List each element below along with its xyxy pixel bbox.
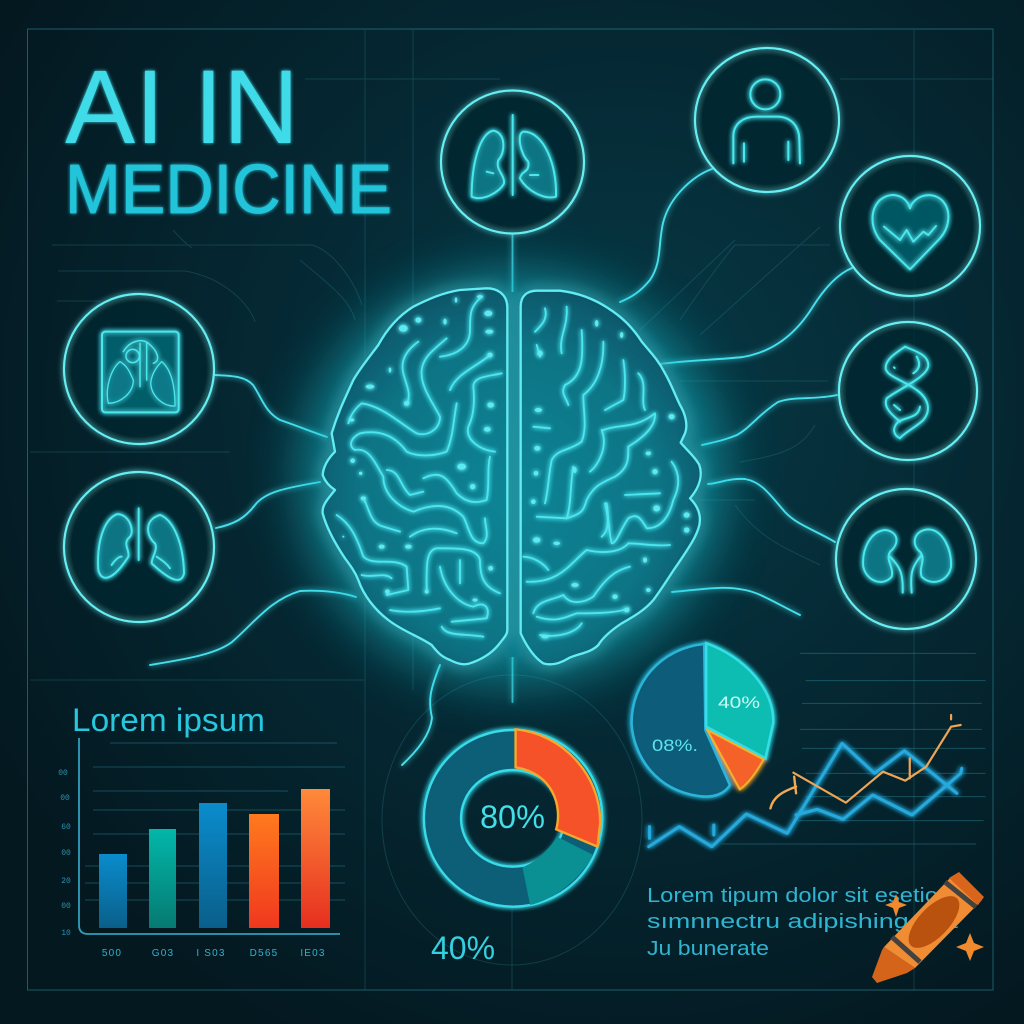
pie blue slice <box>632 644 730 797</box>
connector lines <box>150 169 852 765</box>
pie teal slice <box>706 643 773 758</box>
crayon oval <box>900 888 968 956</box>
line chart orange series <box>793 715 961 803</box>
pie orange slice <box>707 730 764 789</box>
donut chart <box>424 729 602 907</box>
bar chart y labels: 20 <box>61 877 71 886</box>
crayon body <box>884 877 982 968</box>
donut caption value: 40% <box>431 930 495 966</box>
icon: chest x-ray <box>64 294 214 444</box>
icon: lungs <box>64 472 214 622</box>
icon: heart <box>840 156 980 296</box>
bar chart x labels <box>102 948 326 959</box>
pie label blue: 08%. <box>652 736 698 755</box>
line chart blue series <box>649 743 962 847</box>
bar chart y labels: 10 <box>61 929 71 938</box>
bar chart axes <box>79 738 340 934</box>
line chart <box>649 653 986 847</box>
bar chart <box>58 702 345 959</box>
icon: person <box>695 48 839 192</box>
donut base ring <box>424 730 602 907</box>
line chart gridlines <box>721 653 986 844</box>
bar chart bars <box>99 789 330 928</box>
body text: Ju bunerate <box>647 938 769 960</box>
bar chart x labels: D565 <box>250 948 278 959</box>
body text: sımnnectru adipishing, elit <box>647 911 959 933</box>
bar chart x labels: 500 <box>102 948 122 959</box>
crayon bands <box>892 882 976 962</box>
bar chart x labels: I S03 <box>196 948 226 959</box>
sparkle small <box>885 894 907 917</box>
title <box>65 49 392 228</box>
bar chart y labels: 00 <box>61 849 71 858</box>
brain left hemisphere <box>323 288 507 664</box>
brain <box>323 288 701 664</box>
bar chart y labels: 00 <box>60 794 70 803</box>
bar chart y labels: 00 <box>61 902 71 911</box>
title: AI IN <box>65 49 299 166</box>
bar chart gridlines <box>85 743 345 900</box>
pie chart <box>632 643 773 797</box>
crayon cap <box>949 872 984 905</box>
bar chart x labels: IE03 <box>300 948 326 959</box>
bar chart y labels: 60 <box>61 823 71 832</box>
donut orange segment <box>516 729 600 847</box>
pie label teal: 40% <box>718 693 760 712</box>
bar chart heading: Lorem ipsum <box>72 702 265 738</box>
crayon tip <box>872 947 915 983</box>
icon: kidneys <box>836 489 976 629</box>
brain centre gap <box>505 292 522 657</box>
body text: Lorem tipum dolor sit esetio <box>647 885 938 907</box>
bar chart y labels: 00 <box>58 769 68 778</box>
icon: dna strand <box>839 322 977 460</box>
sparkle large <box>956 933 984 961</box>
brain right hemisphere <box>521 291 701 664</box>
title: MEDICINE <box>65 150 392 228</box>
brain glow <box>300 273 724 683</box>
bar chart x labels: G03 <box>152 948 174 959</box>
icon: crayon with sparkles <box>872 872 984 983</box>
line chart orange arrow <box>770 777 796 808</box>
icon: top lungs <box>441 90 584 234</box>
bar chart y labels <box>58 769 71 938</box>
donut centre value: 80% <box>480 799 545 835</box>
donut teal segment <box>522 837 593 905</box>
body text <box>647 885 959 960</box>
